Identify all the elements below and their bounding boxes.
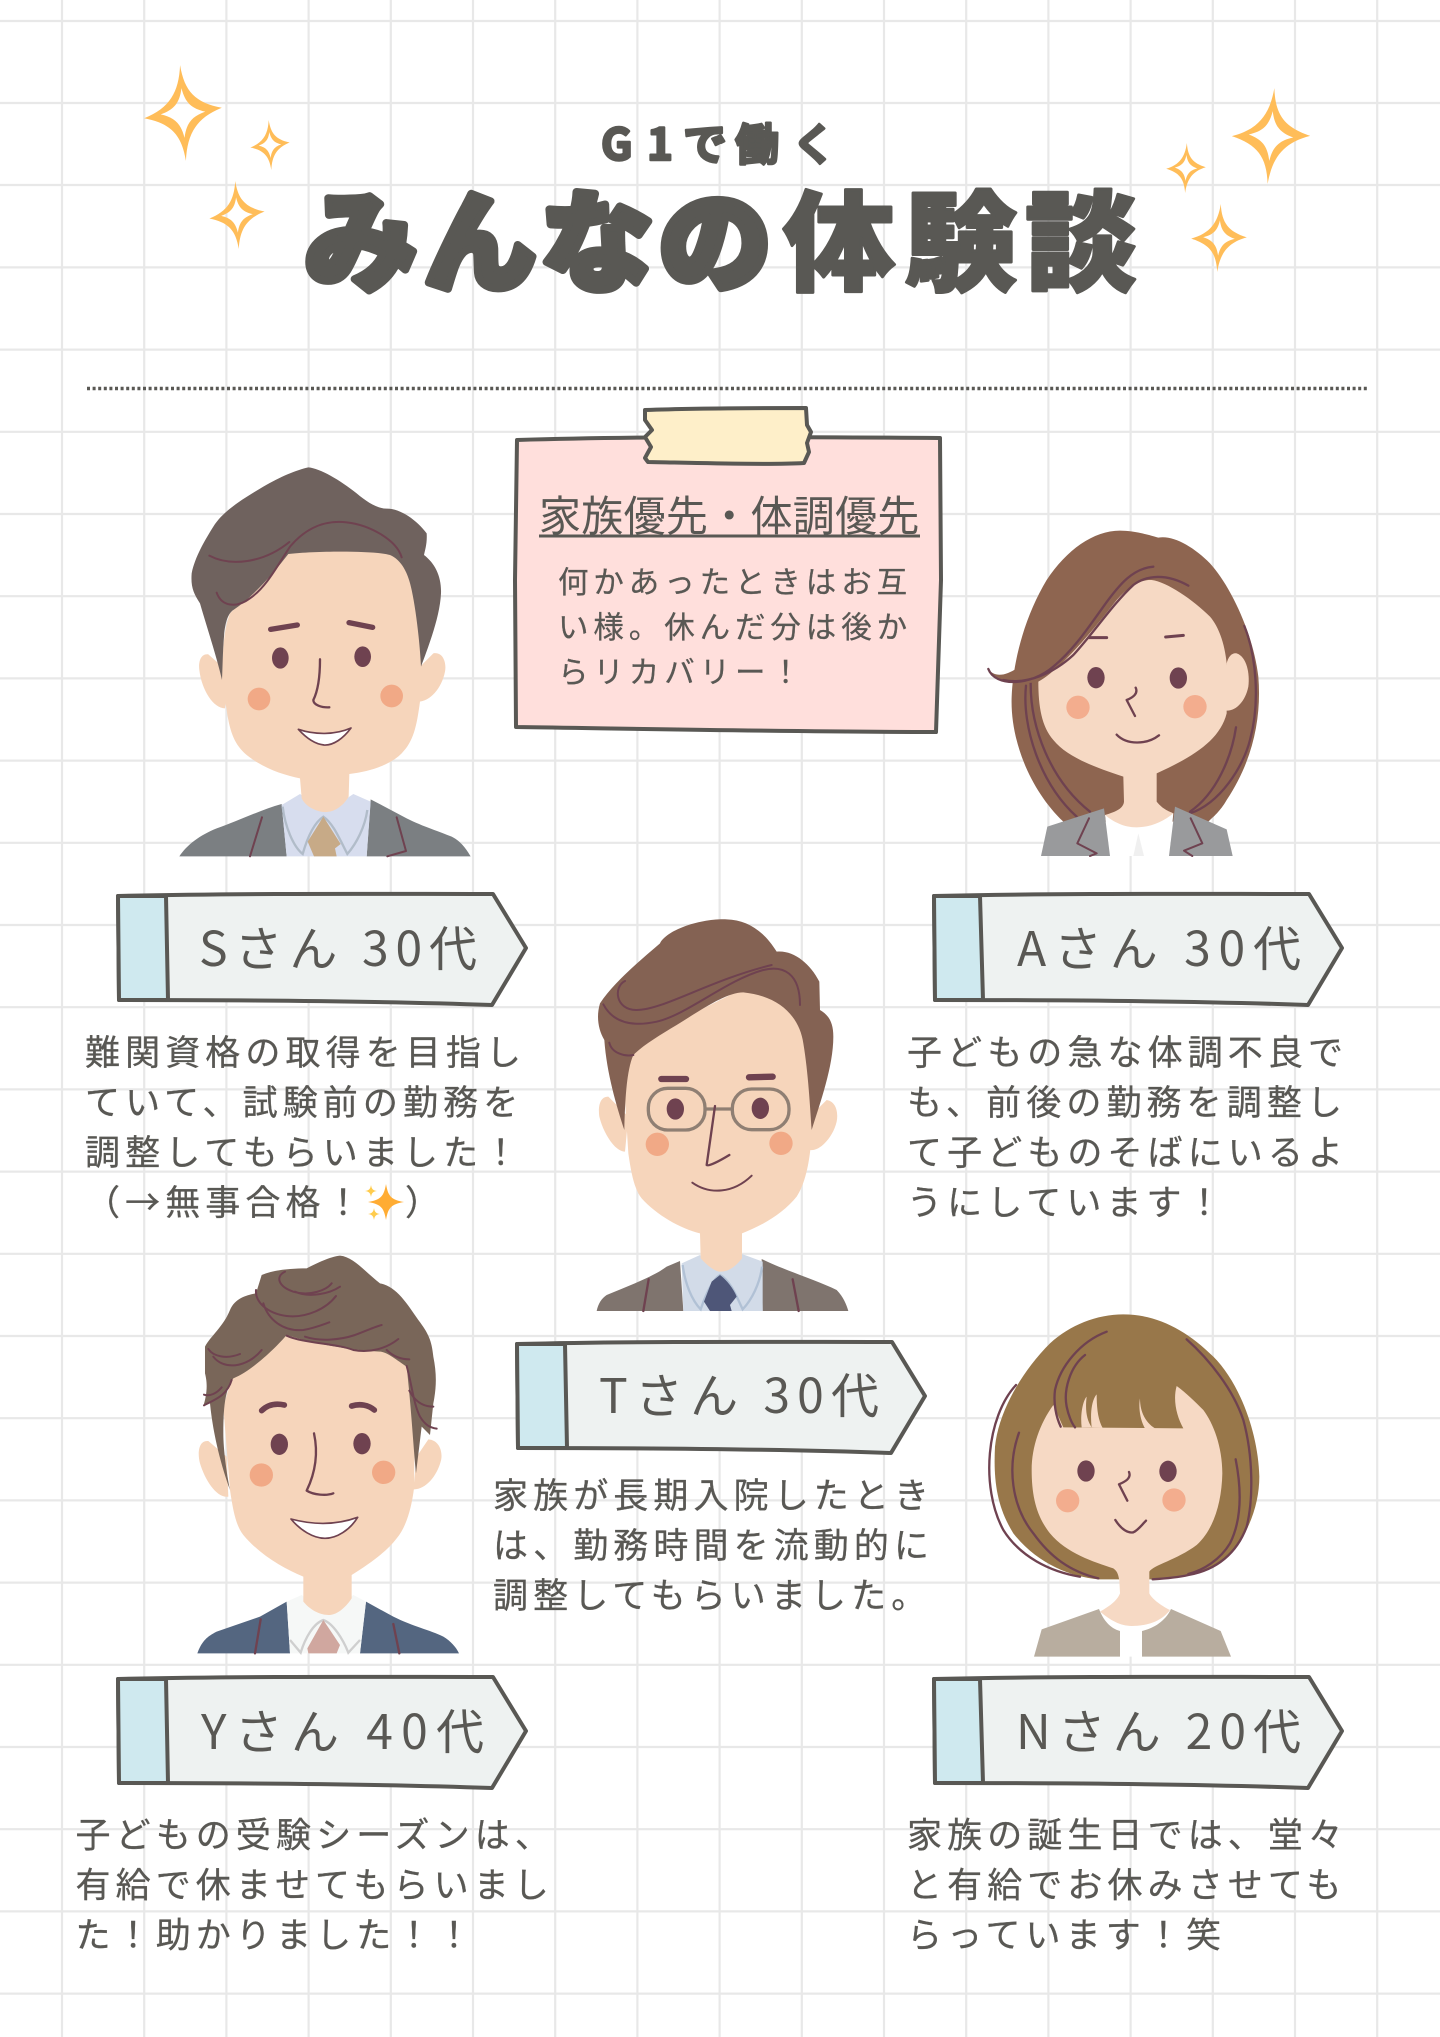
text: N: 家族の誕生日では、堂々: [907, 1808, 1348, 1858]
note heading: 家族優先・体調優先: [539, 483, 920, 544]
text: T: 調整してもらいました。: [493, 1568, 931, 1619]
note text: らリカバリー！: [558, 648, 806, 692]
label: A: Aさん 30代: [1017, 910, 1301, 980]
label: Y: Yさん 40代: [200, 1693, 484, 1763]
text: S: ていて、試験前の勤務を: [85, 1075, 523, 1126]
text: Y: 有給で休ませてもらいまし: [76, 1858, 554, 1908]
note text: 何かあったときはお互: [558, 558, 912, 602]
title block: [305, 109, 1137, 314]
text: A: て子どものそばにいるよ: [907, 1125, 1348, 1176]
text: S: 調整してもらいました！: [85, 1125, 523, 1176]
main title: 体験談: [783, 156, 1137, 314]
portrait: T: [597, 919, 848, 1311]
text: N: と有給でお休みさせても: [907, 1858, 1346, 1908]
label: S: Sさん 30代: [199, 910, 477, 980]
main title: みんなの: [305, 156, 771, 314]
icon: sparkles left: [141, 63, 291, 250]
text: A: うにしています！: [907, 1175, 1227, 1226]
icon: sparkles right: [1165, 85, 1313, 273]
icon: sparkles emoji: [365, 1184, 404, 1220]
text: T: は、勤務時間を流動的に: [493, 1518, 934, 1569]
label: S: [118, 894, 526, 1005]
label: A: [934, 894, 1342, 1005]
text: A: 子どもの急な体調不良で: [907, 1025, 1348, 1076]
text: N: らっています！笑: [907, 1908, 1226, 1958]
text: S: ）: [405, 1175, 445, 1226]
text: A: も、前後の勤務を調整し: [907, 1075, 1347, 1126]
subtitle: G1で働く: [601, 109, 836, 173]
label: T: [517, 1342, 925, 1453]
portrait: A: [988, 531, 1259, 856]
tape: [645, 408, 811, 464]
portrait: Y: [197, 1256, 459, 1653]
label: T: Tさん 30代: [599, 1357, 879, 1427]
label: N: Nさん 20代: [1016, 1693, 1301, 1763]
text: S: （→無事合格！: [85, 1175, 366, 1226]
text: Y: 子どもの受験シーズンは、: [76, 1808, 555, 1858]
note: family and health first: [515, 408, 941, 732]
portrait: S: [179, 467, 471, 856]
label: N: [934, 1677, 1342, 1788]
portrait: N: [989, 1314, 1259, 1657]
text: Y: た！助かりました！！: [76, 1908, 477, 1958]
text: S: 難関資格の取得を目指し: [85, 1025, 526, 1076]
label: Y: [118, 1677, 526, 1788]
text: T: 家族が長期入院したとき: [493, 1468, 934, 1519]
glasses: [648, 1088, 789, 1130]
note text: い様。休んだ分は後か: [558, 603, 912, 647]
